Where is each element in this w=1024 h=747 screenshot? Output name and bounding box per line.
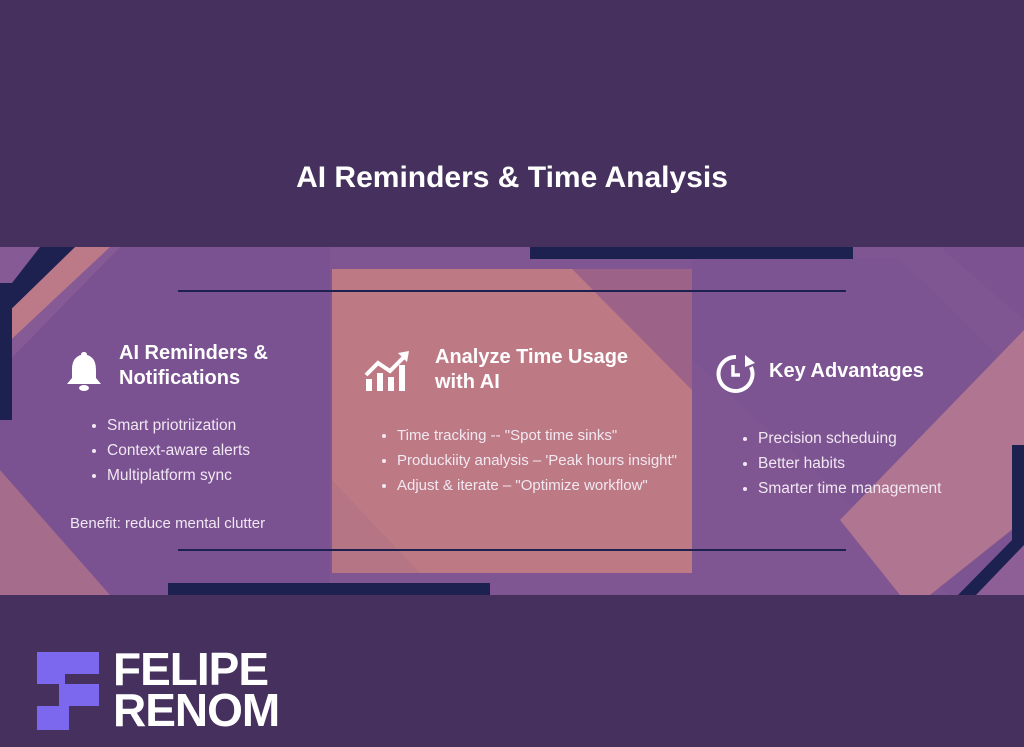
bullet list: Adjust & iterate – "Optimize workflow"	[397, 477, 648, 494]
logo text: FELIPE	[113, 643, 268, 695]
bullet list: Smart priotriization	[107, 417, 236, 434]
icon: clock	[716, 355, 755, 393]
heading	[435, 346, 628, 393]
bullet list: Multiplatform sync	[107, 467, 232, 484]
heading: AI Reminders &	[119, 342, 268, 364]
benefit text: Benefit: reduce mental clutter	[70, 515, 265, 532]
bullet list: Better habits	[758, 455, 845, 472]
bullet list: Context-aware alerts	[107, 442, 250, 459]
bullet list: Smarter time management	[758, 480, 942, 497]
panel: analyze	[364, 346, 677, 494]
bullet list	[382, 427, 677, 494]
bullet list: Produckiity analysis – 'Peak hours insight"	[397, 452, 677, 469]
heading: Notifications	[119, 367, 240, 389]
banner background	[0, 247, 1024, 595]
bullet list	[743, 430, 942, 497]
logo	[37, 643, 279, 736]
panel: advantages	[716, 355, 942, 497]
logo text: RENOM	[113, 684, 279, 736]
bullet list: Precision scheduing	[758, 430, 897, 447]
icon: logo mark	[37, 652, 99, 730]
heading: with AI	[435, 371, 500, 393]
icon: bell	[67, 352, 101, 391]
logo text	[113, 643, 279, 736]
heading	[119, 342, 268, 389]
panel: reminders	[67, 342, 268, 532]
bullet list: Time tracking -- "Spot time sinks"	[397, 427, 617, 444]
heading: Key Advantages	[769, 360, 924, 382]
icon: chart	[364, 351, 409, 391]
title: AI Reminders & Time Analysis	[296, 161, 728, 194]
bullet list	[92, 417, 250, 484]
heading: Analyze Time Usage	[435, 346, 628, 368]
